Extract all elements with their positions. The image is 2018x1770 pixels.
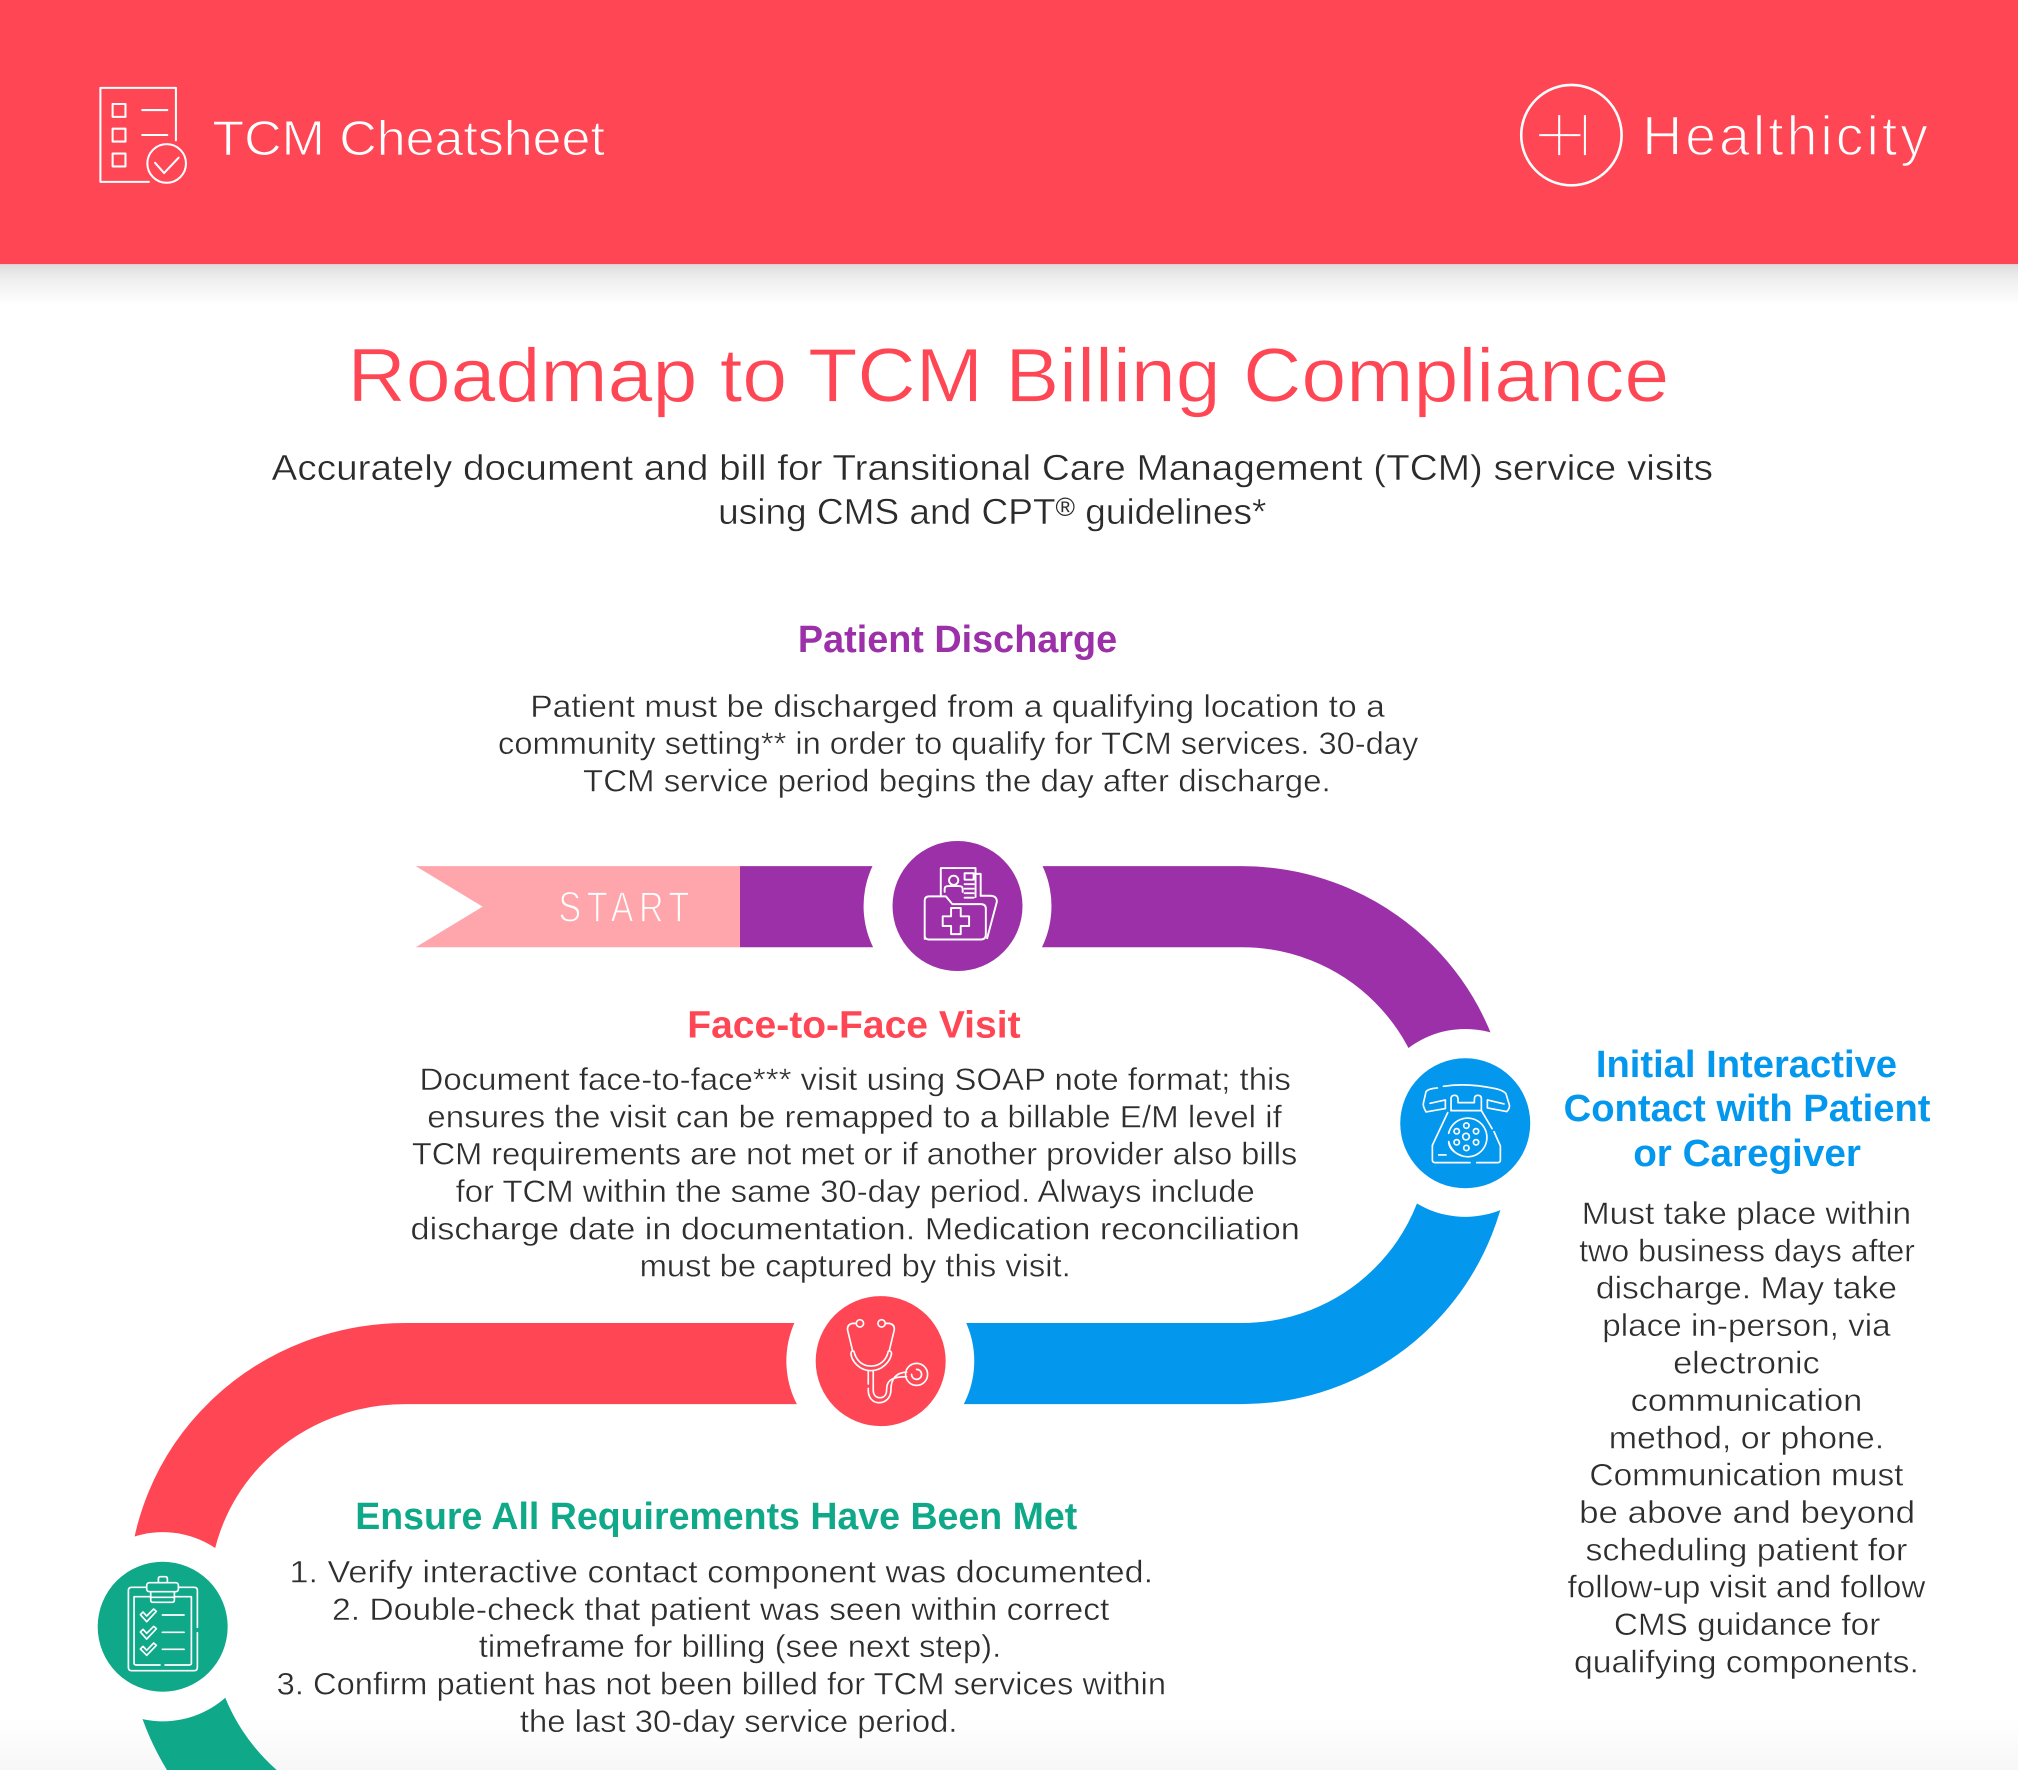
text: face-to-face visit xyxy=(411,1061,1300,1284)
header band xyxy=(0,0,2018,264)
text: initial contact: method, or phone. xyxy=(1609,1419,1884,1455)
text: patient discharge xyxy=(498,688,1419,799)
text: requirements list xyxy=(277,1553,1166,1739)
text: initial contact: electronic xyxy=(1673,1345,1820,1381)
text: initial contact: qualifying components. xyxy=(1574,1643,1919,1679)
text: patient discharge: community setting** in order to qualify for TCM services. 30-day xyxy=(498,725,1419,761)
text: initial contact: follow-up visit and follow xyxy=(1568,1569,1926,1605)
icon: telephone xyxy=(1400,1058,1530,1188)
heading: Face-to-Face Visit: Face-to-Face Visit xyxy=(687,1004,1021,1046)
text: face-to-face visit: discharge date in documentation. Medication reconciliation xyxy=(411,1210,1300,1246)
icon: clipboard xyxy=(98,1562,228,1692)
subtitle: using CMS and CPT xyxy=(718,491,1046,532)
text: requirements list: 3. Confirm patient has not been billed for TCM services within xyxy=(277,1665,1166,1701)
track segment: blue xyxy=(901,1135,1470,1364)
heading: Patient Discharge: Patient Discharge xyxy=(798,619,1117,661)
text: initial contact: Communication must xyxy=(1589,1457,1904,1493)
start banner: START xyxy=(559,884,689,931)
text: patient discharge: TCM service period begins the day after discharge. xyxy=(583,763,1331,799)
heading: Initial Interactive Contact: or Caregiver xyxy=(1633,1133,1861,1175)
text: initial contact: place in-person, via xyxy=(1602,1307,1891,1343)
subtitle xyxy=(272,447,1713,532)
text: requirements list: 2. Double-check that patient was seen within correct xyxy=(332,1591,1110,1627)
text: patient discharge: Patient must be discharged from a qualifying location to a xyxy=(530,688,1385,724)
subtitle: Accurately document and bill for Transitional Care Management (TCM) service visits xyxy=(272,447,1713,488)
text: initial contact: discharge. May take xyxy=(1596,1270,1897,1306)
track segment: purple xyxy=(740,907,1470,1135)
text: face-to-face visit: Document face-to-face*** visit using SOAP note format; this xyxy=(420,1061,1291,1097)
text: requirements list: 1. Verify interactive contact component was documented. xyxy=(290,1553,1153,1589)
icon: checklist xyxy=(100,88,186,183)
heading: Initial Interactive Contact xyxy=(1564,1044,1931,1175)
logo: Healthicity xyxy=(1521,85,1928,185)
track segment: green xyxy=(169,1624,309,1770)
text: initial contact: CMS guidance for xyxy=(1614,1606,1880,1642)
track segment: red xyxy=(169,1364,880,1592)
text: requirements list: the last 30-day service period. xyxy=(520,1703,958,1739)
start banner xyxy=(416,866,741,947)
text: requirements list: timeframe for billing (see next step). xyxy=(479,1628,1001,1664)
heading: Initial Interactive Contact: Contact with Patient xyxy=(1564,1088,1931,1130)
text: initial contact: Must take place within xyxy=(1582,1195,1911,1231)
text: face-to-face visit: must be captured by this visit. xyxy=(640,1248,1071,1284)
heading: Initial Interactive Contact: Initial Interactive xyxy=(1596,1044,1897,1086)
text: initial contact xyxy=(1568,1195,1926,1679)
title: Roadmap to TCM Billing Compliance xyxy=(347,334,1669,419)
text: face-to-face visit: TCM requirements are not met or if another provider also bills xyxy=(412,1136,1297,1172)
text: initial contact: communication xyxy=(1631,1382,1862,1418)
text: face-to-face visit: ensures the visit can be remapped to a billable E/M level if xyxy=(427,1098,1282,1134)
roadmap track xyxy=(68,812,1559,1770)
text: initial contact: scheduling patient for xyxy=(1586,1531,1907,1567)
text: initial contact: two business days after xyxy=(1579,1232,1915,1268)
logo: Healthicity: Healthicity xyxy=(1642,105,1928,167)
header title: TCM Cheatsheet xyxy=(212,112,605,166)
text: initial contact: be above and beyond xyxy=(1579,1494,1915,1530)
heading: Ensure All Requirements: Ensure All Requirements Have Been Met xyxy=(355,1496,1078,1538)
icon: stethoscope xyxy=(816,1296,946,1426)
icon: patient folder xyxy=(893,841,1023,971)
subtitle: guidelines* xyxy=(1075,491,1266,532)
subtitle: ® xyxy=(1056,494,1075,522)
text: face-to-face visit: for TCM within the same 30-day period. Always include xyxy=(456,1173,1255,1209)
